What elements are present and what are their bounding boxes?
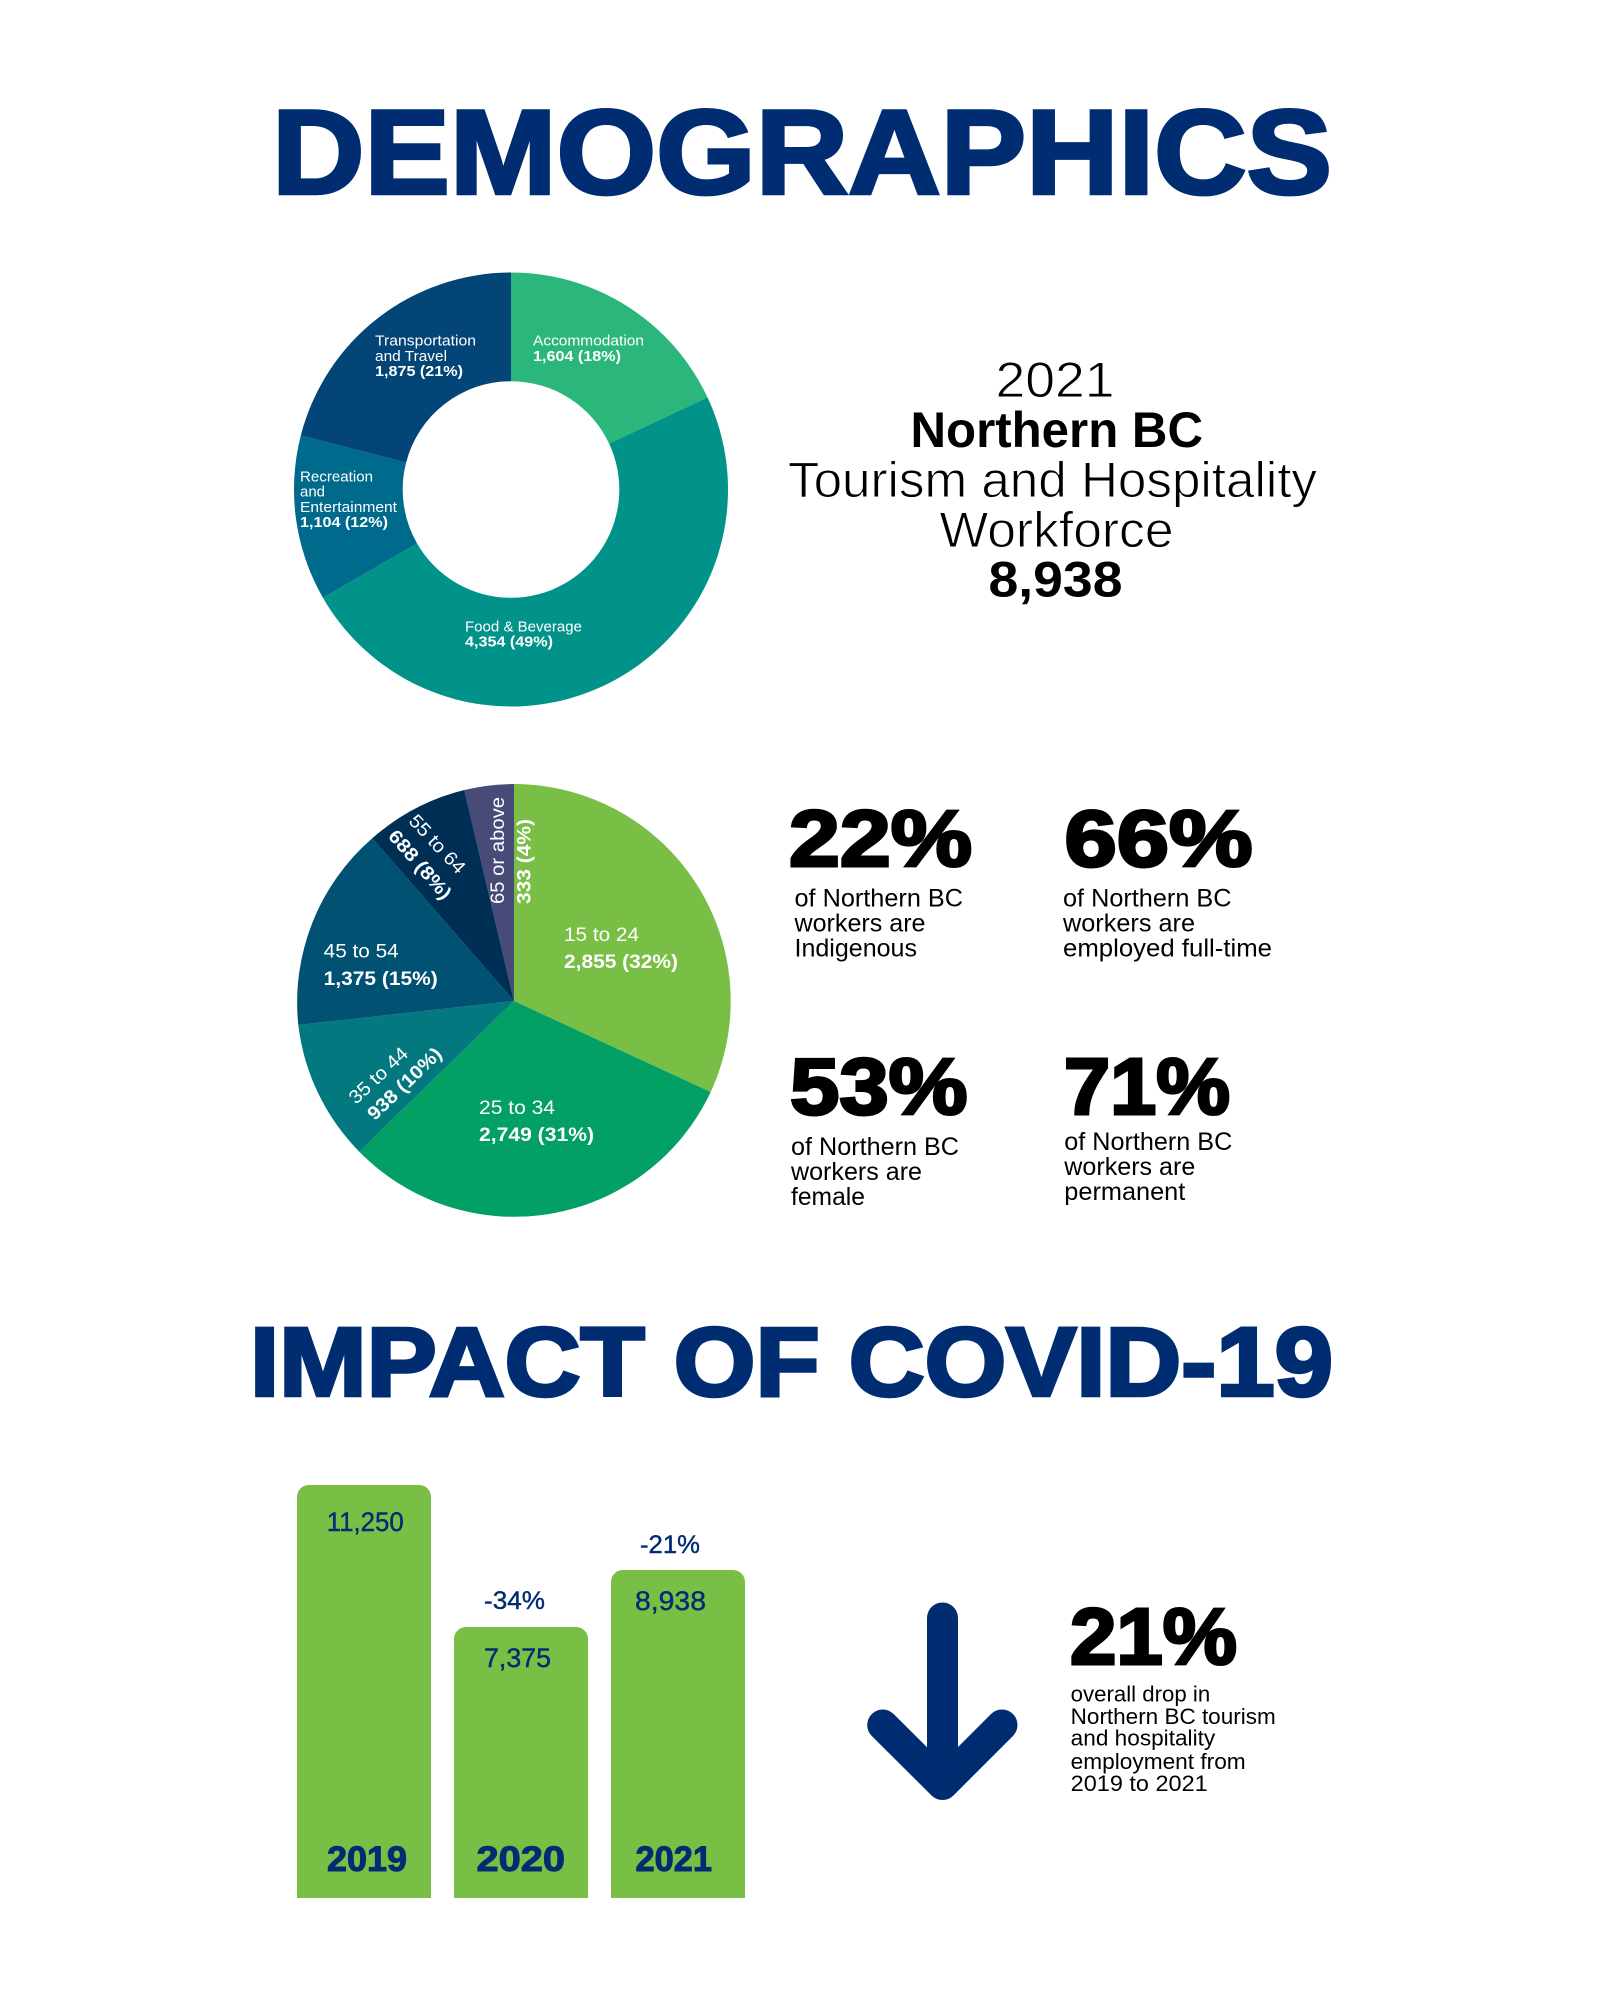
stat: 21% overall drop: 21% <box>1070 1592 1237 1681</box>
text block: 2021 Northern BC workforce total: Northern BC <box>910 402 1203 458</box>
slice: 15 to 24: 15 to 24 <box>564 925 639 946</box>
slice: Food and Beverage: Food & Beverage <box>465 619 582 636</box>
slice: Transportation and Travel: and Travel <box>375 348 447 365</box>
bar: 2020: 7,375 <box>484 1643 551 1673</box>
slice: Recreation and Entertainment: Entertainment <box>300 499 398 516</box>
slice: Food and Beverage: 4,354 (49%) <box>465 634 553 651</box>
bar: 2019: 11,250 <box>327 1507 404 1537</box>
label: -21% change: -21% <box>640 1531 700 1559</box>
slice: Accommodation: Accommodation <box>533 333 644 350</box>
slice: Transportation and Travel <box>301 272 511 463</box>
icon: down arrow <box>883 1618 1002 1784</box>
slice: 45 to 54: 45 to 54 <box>324 942 399 963</box>
stat: 71% permanent <box>1063 1042 1232 1206</box>
stat: 71% permanent: permanent <box>1064 1178 1185 1206</box>
donut chart: workforce by sector <box>294 272 728 706</box>
stat: 53% female: of Northern BC <box>791 1133 959 1161</box>
text block: 2021 Northern BC workforce total: Tourism and Hospitality <box>788 452 1317 508</box>
slice: Accommodation <box>511 272 708 444</box>
stat: 53% female: female <box>791 1183 865 1211</box>
slice: 35 to 44: 938 (10%) <box>364 1044 447 1125</box>
slice: 15 to 24 <box>514 784 731 1092</box>
slice: Recreation and Entertainment: Recreation <box>300 469 373 486</box>
heading: Impact of COVID-19: IMPACT OF COVID-19 <box>250 1308 1333 1416</box>
bar: 2020 <box>454 1627 588 1898</box>
text block: 2021 Northern BC workforce total: 8,938 <box>988 552 1122 608</box>
slice: Transportation and Travel: Transportation <box>375 333 476 350</box>
slice: Recreation and Entertainment: 1,104 (12%) <box>300 514 388 531</box>
slice: 65 or above <box>464 784 536 1001</box>
stat: 21% overall drop: 2019 to 2021 <box>1071 1771 1208 1796</box>
slice: Recreation and Entertainment <box>294 436 417 598</box>
stat: 21% overall drop: overall drop in <box>1071 1682 1210 1707</box>
bar: 2021 <box>611 1570 745 1898</box>
slice: Food and Beverage <box>323 397 728 706</box>
stat: 22% Indigenous: workers are <box>793 910 926 938</box>
slice: 65 or above: 333 (4%) <box>515 819 536 904</box>
stat: 66% full-time: workers are <box>1062 910 1195 938</box>
bar: 2019 <box>297 1485 431 1898</box>
stat: 53% female: workers are <box>790 1158 922 1186</box>
stat: 21% overall drop: Northern BC tourism <box>1071 1704 1276 1729</box>
slice: 25 to 34: 2,749 (31%) <box>479 1125 594 1146</box>
slice: Recreation and Entertainment: and <box>300 484 325 500</box>
slice: 65 or above: 65 or above <box>488 797 509 904</box>
bar: 2021: 2021 <box>636 1840 712 1879</box>
slice: 25 to 34 <box>359 1001 711 1217</box>
text block: 2021 Northern BC workforce total: 2021 <box>996 352 1114 408</box>
text block: 2021 Northern BC workforce total: Workforce <box>940 502 1174 558</box>
slice: Transportation and Travel: 1,875 (21%) <box>375 363 463 380</box>
stat: 66% full-time: 66% <box>1064 794 1252 883</box>
bar: 2021: 8,938 <box>635 1586 706 1616</box>
stat: 22% Indigenous: Indigenous <box>794 935 917 963</box>
bar chart: employment 2019 to 2021 <box>297 1485 745 1898</box>
stat: 22% Indigenous <box>789 794 972 963</box>
stat: 71% permanent: workers are <box>1063 1153 1195 1181</box>
slice: 25 to 34: 25 to 34 <box>479 1098 555 1119</box>
slice: 55 to 64: 55 to 64 <box>404 811 470 879</box>
stat: 71% permanent: of Northern BC <box>1064 1128 1232 1156</box>
label: -34% change: -34% <box>484 1587 545 1615</box>
stat: 22% Indigenous: of Northern BC <box>794 885 963 913</box>
stat: 71% permanent: 71% <box>1064 1042 1230 1131</box>
slice: 45 to 54 <box>297 838 514 1025</box>
stat: 53% female: 53% <box>790 1042 968 1131</box>
stat: 66% full-time: of Northern BC <box>1063 885 1232 913</box>
stat: 66% full-time: employed full-time <box>1063 935 1272 963</box>
slice: 55 to 64 <box>372 790 514 1001</box>
stat: 21% overall drop: and hospitality <box>1071 1726 1215 1751</box>
stat: 21% overall drop: employment from <box>1071 1749 1246 1774</box>
stat: 22% Indigenous: 22% <box>789 794 972 883</box>
slice: Accommodation: 1,604 (18%) <box>533 348 621 365</box>
slice: 15 to 24: 2,855 (32%) <box>564 952 678 973</box>
slice: 35 to 44 <box>298 1001 514 1152</box>
bar: 2019: 2019 <box>327 1840 407 1879</box>
bar: 2020: 2020 <box>476 1840 565 1879</box>
slice: 35 to 44: 35 to 44 <box>345 1043 413 1109</box>
pie chart: workforce by age <box>297 784 731 1217</box>
text block: 2021 Northern BC workforce total <box>788 352 1317 608</box>
stat: 66% full-time <box>1062 794 1272 963</box>
stat: 53% female <box>790 1042 968 1211</box>
slice: 55 to 64: 688 (8%) <box>384 826 455 904</box>
stat: 21% overall drop <box>1070 1592 1276 1796</box>
title: Demographics: DEMOGRAPHICS <box>272 86 1332 220</box>
slice: 45 to 54: 1,375 (15%) <box>324 969 438 990</box>
